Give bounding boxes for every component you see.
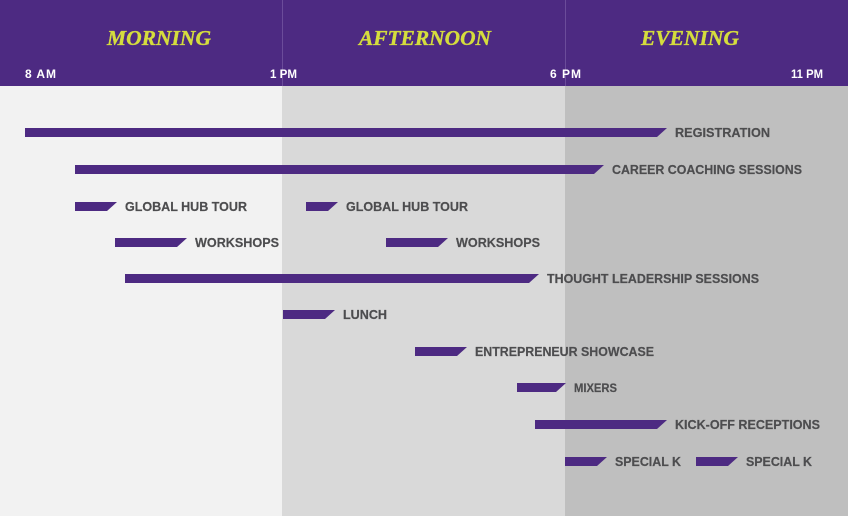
time label: 6 PM: 6 PM xyxy=(550,67,581,81)
row: thought leadership sessions xyxy=(125,272,759,286)
header band xyxy=(0,0,848,86)
row: global hub tour morning: GLOBAL HUB TOUR xyxy=(125,200,247,214)
row: career coaching sessions xyxy=(75,163,802,177)
row: career coaching sessions: CAREER COACHING SESSIONS xyxy=(612,163,802,177)
row: lunch: LUNCH xyxy=(343,308,387,322)
row: special k second xyxy=(696,455,812,469)
row: thought leadership sessions: THOUGHT LEADERSHIP SESSIONS xyxy=(547,272,759,286)
panel: afternoon background xyxy=(282,86,565,516)
row: special k second: SPECIAL K xyxy=(746,455,812,469)
panel: evening background xyxy=(565,86,848,516)
row: workshops morning: WORKSHOPS xyxy=(195,236,279,250)
row: entrepreneur showcase: ENTREPRENEUR SHOWCASE xyxy=(475,345,654,359)
row: mixers xyxy=(517,381,617,395)
heading: morning: MORNING xyxy=(106,26,211,50)
row: kick-off receptions xyxy=(535,418,820,432)
row: workshops morning xyxy=(115,236,279,250)
row: lunch xyxy=(283,308,387,322)
row: global hub tour afternoon: GLOBAL HUB TOUR xyxy=(346,200,468,214)
row: registration xyxy=(25,126,770,140)
row: mixers: MIXERS xyxy=(574,381,617,395)
time label: 11 PM: 11 PM xyxy=(791,67,823,81)
panel: morning background xyxy=(0,86,282,516)
time label: 1 PM: 1 PM xyxy=(270,67,297,81)
row: special k first xyxy=(565,455,681,469)
row: special k first: SPECIAL K xyxy=(615,455,681,469)
row: workshops afternoon xyxy=(386,236,540,250)
time label: 8 AM: 8 AM xyxy=(25,67,56,81)
heading: evening: EVENING xyxy=(640,26,739,50)
row: workshops afternoon: WORKSHOPS xyxy=(456,236,540,250)
row: kick-off receptions: KICK-OFF RECEPTIONS xyxy=(675,418,820,432)
row: registration: REGISTRATION xyxy=(675,126,770,140)
heading: afternoon: AFTERNOON xyxy=(357,26,492,50)
